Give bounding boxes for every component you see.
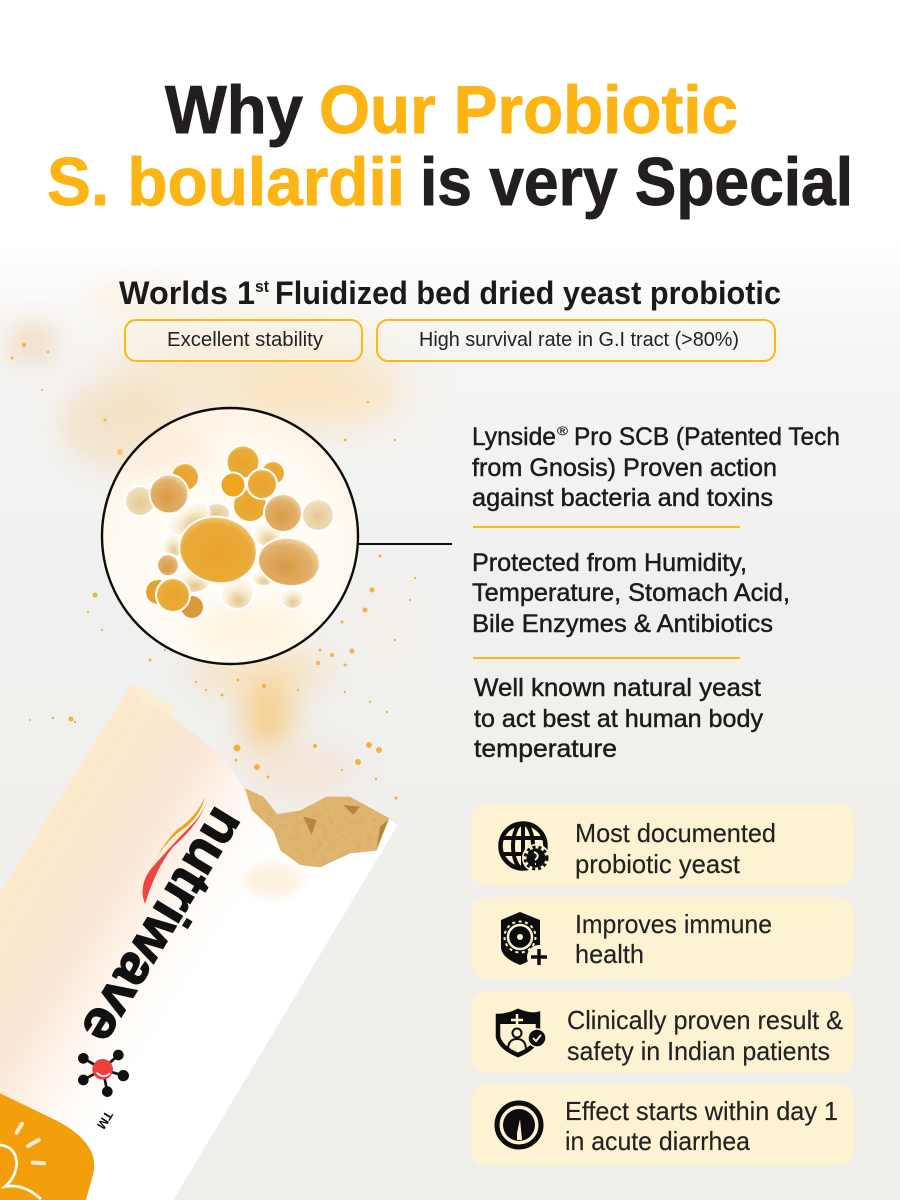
- text block: natural yeast: Well known natural yeast: [474, 674, 761, 702]
- icon: shield with plus: [501, 912, 551, 969]
- title: is very Special: [420, 144, 853, 220]
- trademark: TM: [94, 1108, 115, 1131]
- card: effect within day 1: in acute diarrhea: [565, 1126, 751, 1156]
- white sun icon on label: [0, 1124, 44, 1198]
- text block: protection: Protected from Humidity,: [472, 549, 747, 577]
- text block: Lynside: against bacteria and toxins: [472, 484, 773, 512]
- torn sachet edge: [132, 683, 175, 717]
- subtitle: Fluidized bed dried yeast probiotic: [275, 275, 781, 311]
- sachet body: [0, 683, 397, 1200]
- nutriwave brand wordmark: nutriwave: [70, 798, 259, 1055]
- pill: excellent stability: [125, 320, 362, 361]
- icon: shield with patient and check: [498, 1011, 546, 1055]
- sachet: [0, 683, 397, 1200]
- title: S. boulardii: [47, 144, 405, 220]
- card: effect within day 1: Effect starts within day 1: [565, 1096, 838, 1126]
- subtitle: Worlds 1: [119, 275, 255, 311]
- text block: Lynside: Pro SCB (Patented Tech: [574, 423, 840, 451]
- connector line: [358, 543, 452, 545]
- card: clinically proven: Clinically proven result &: [567, 1005, 843, 1035]
- circle inner haze: [105, 424, 305, 650]
- text block: protection: Bile Enzymes & Antibiotics: [472, 610, 773, 638]
- logo molecule mark: [79, 1051, 128, 1096]
- icon: stopwatch dial: [497, 1103, 541, 1147]
- card: most documented: probiotic yeast: [575, 849, 741, 879]
- text block: Lynside: ®: [557, 424, 568, 438]
- title: Why: [165, 72, 303, 148]
- pill: survival rate: High survival rate in G.I tract (>80%): [419, 329, 739, 351]
- card: clinically proven: [471, 991, 854, 1073]
- text block: protection: Temperature, Stomach Acid,: [472, 579, 790, 607]
- text block: natural yeast: temperature: [474, 735, 617, 763]
- logo swoosh: [143, 797, 208, 904]
- pill: excellent stability: Excellent stability: [167, 329, 323, 351]
- yeast cell magnified circle: [102, 408, 358, 664]
- title: [47, 72, 853, 220]
- text block: Lynside: from Gnosis) Proven action: [472, 454, 777, 482]
- text block: natural yeast: [474, 674, 763, 763]
- text block: natural yeast: to act best at human body: [474, 705, 763, 733]
- text block: protection: [472, 549, 790, 638]
- icon: globe with gear: [500, 824, 550, 872]
- text block: Lynside: [472, 423, 840, 512]
- powder inside sachet: [243, 788, 389, 897]
- subtitle: st: [255, 277, 269, 296]
- card: immune health: health: [575, 939, 644, 969]
- powder cloud behind the sachet and circle: [8, 284, 415, 798]
- title: Our Probiotic: [319, 72, 738, 148]
- pill: survival rate: [377, 320, 775, 361]
- text block: Lynside: Lynside: [472, 423, 556, 451]
- card: effect within day 1: [471, 1084, 854, 1166]
- yeast cells: [125, 446, 334, 619]
- card: most documented: Most documented: [575, 818, 776, 848]
- powder speckles: [10, 343, 416, 800]
- orange label corner: [0, 1093, 94, 1200]
- card: clinically proven: safety in Indian patients: [567, 1036, 830, 1066]
- card: immune health: [471, 897, 854, 979]
- card: most documented: [471, 804, 854, 886]
- card: immune health: Improves immune: [575, 909, 772, 939]
